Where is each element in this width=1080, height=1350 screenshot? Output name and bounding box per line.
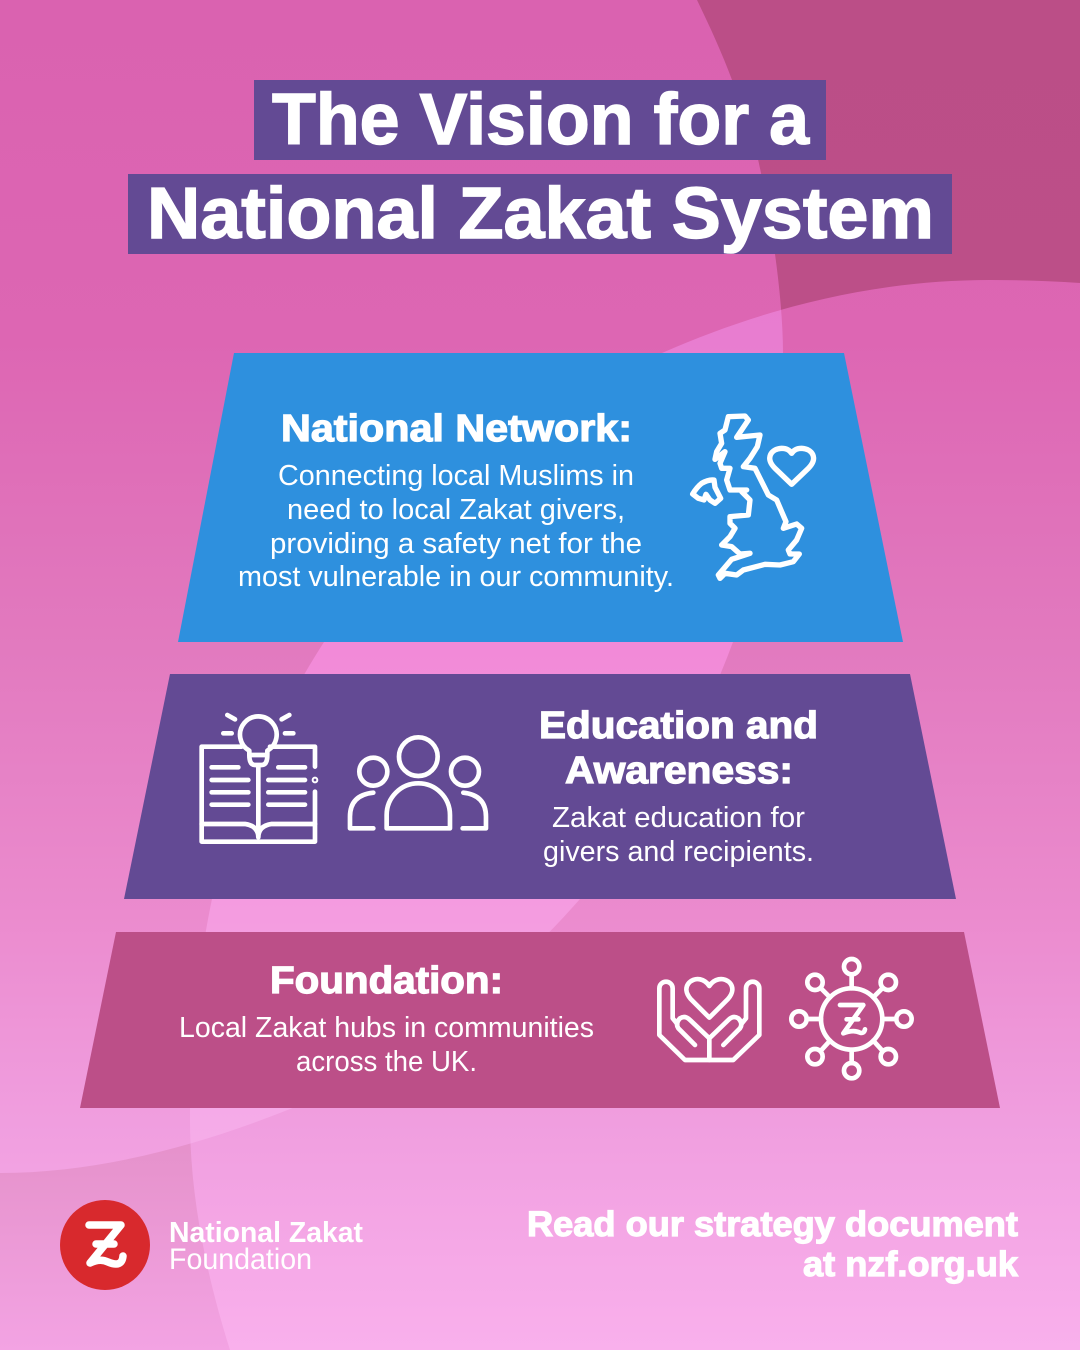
- text: education description: [543, 802, 814, 868]
- call to action: Read our strategy document: [527, 1205, 1018, 1244]
- text: foundation description: [179, 1012, 594, 1078]
- logo: National Zakat Foundation: National Zakat: [169, 1217, 363, 1249]
- text: education description: givers and recipients.: [543, 836, 814, 868]
- icon: people group: [350, 737, 486, 828]
- panel: national network: [178, 353, 903, 642]
- panel: education and awareness: [124, 674, 956, 899]
- text: national network description: providing a safety net for the: [270, 528, 642, 560]
- heading: national network: National Network:: [281, 408, 632, 450]
- text: national network description: Connecting local Muslims in: [278, 460, 634, 492]
- text: national network description: [238, 460, 674, 593]
- text: education description: Zakat education for: [552, 802, 805, 834]
- icon: hands holding heart: [659, 979, 759, 1060]
- icon: Z hub network: [791, 959, 912, 1078]
- panel: foundation: [80, 932, 1000, 1108]
- title: [128, 80, 952, 254]
- icon: UK map with heart: [693, 416, 814, 578]
- text: foundation description: Local Zakat hubs in communities: [179, 1012, 594, 1044]
- heading: education and awareness: Awareness:: [565, 750, 793, 792]
- call to action: at nzf.org.uk: [803, 1245, 1019, 1284]
- title: National Zakat System: [147, 174, 934, 254]
- heading: education and awareness: Education and: [539, 705, 818, 747]
- text: national network description: need to local Zakat givers,: [287, 494, 625, 526]
- icon: open book with light bulb: [202, 715, 316, 842]
- heading: foundation: Foundation:: [270, 960, 503, 1002]
- heading: education and awareness: [539, 705, 818, 792]
- call to action: [527, 1205, 1019, 1284]
- title: The Vision for a: [272, 80, 810, 160]
- text: national network description: most vulnerable in our community.: [238, 561, 674, 593]
- text: foundation description: across the UK.: [296, 1046, 477, 1078]
- logo: National Zakat Foundation: Foundation: [169, 1243, 312, 1276]
- logo: National Zakat Foundation: [60, 1200, 363, 1290]
